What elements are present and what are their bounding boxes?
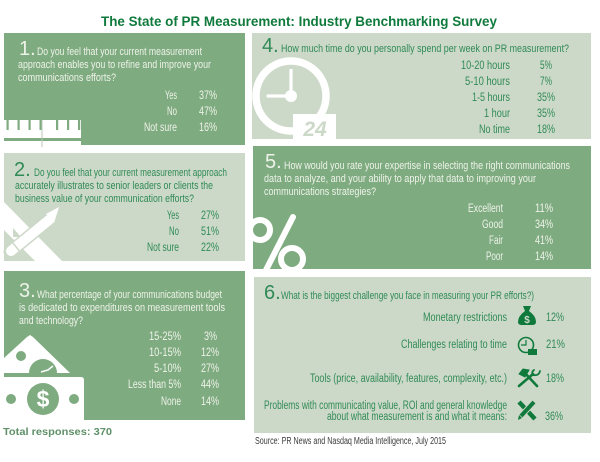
question 2 answers: No: [169, 226, 179, 238]
question 4 answers: 1-5 hours: [472, 92, 510, 104]
question 5 answers: 11%: [535, 203, 553, 215]
source note: Source: PR News and Nasdaq Media Intelligence, July 2015: [255, 436, 446, 447]
question 3 answers: [128, 331, 219, 408]
question 4 answers: 10-20 hours: [461, 60, 510, 72]
question 4 answers: No time: [479, 124, 510, 136]
question 3 number: 3.: [19, 280, 36, 302]
question 2 answers: Yes: [167, 210, 179, 222]
panel: question 4: [252, 33, 591, 141]
question 5 answers: 34%: [535, 219, 553, 231]
icon: hammer and wrench: [519, 369, 540, 386]
question 4 answers: [461, 60, 555, 136]
question 2 number: 2.: [14, 159, 31, 181]
icon: pencil and ruler small: [518, 402, 535, 420]
answer: monetary restrictions: Monetary restrictions: [423, 312, 507, 324]
answer: monetary restrictions: 12%: [546, 312, 564, 324]
question 1 number: 1.: [19, 38, 36, 60]
icon: money bag: [518, 306, 536, 326]
question 1 answers: Not sure: [144, 122, 177, 134]
question 2 answers: Not sure: [147, 242, 179, 254]
panel: question 3: [0, 271, 245, 420]
question 2 text: business value of your communication efforts?: [15, 193, 194, 205]
question 5 answers: 41%: [535, 235, 553, 247]
question 3 answers: 44%: [201, 379, 219, 391]
question 3 text: and technology?: [19, 315, 83, 327]
question 5 answers: Poor: [486, 251, 503, 263]
question 5 answers: Good: [482, 219, 503, 231]
question 5 text: data to analyze, and your ability to apply that data to improving your: [264, 173, 536, 185]
question 3 answers: 12%: [201, 347, 219, 359]
question 1 answers: [144, 90, 217, 134]
question 5 text: communications strategies?: [264, 186, 376, 198]
question 1 answers: No: [167, 106, 177, 118]
question 2 text: accurately illustrates to senior leaders or clients the: [15, 180, 213, 192]
question 3 answers: 3%: [204, 331, 217, 343]
question 4 answers: 1 hour: [484, 108, 510, 120]
question 3 text: is dedicated to expenditures on measurement tools: [19, 302, 225, 314]
question 3 text: What percentage of your communications budget: [37, 289, 222, 301]
question 3 answers: 10-15%: [149, 347, 181, 359]
icon: clock 24: 24: [302, 118, 327, 141]
question 1 answers: 37%: [199, 90, 217, 102]
icon: clock 24: [256, 61, 336, 141]
question 3 answers: 27%: [201, 363, 219, 375]
answer: time: 21%: [546, 339, 565, 351]
question 5 answers: Fair: [489, 235, 503, 247]
panel: question 1: [4, 33, 245, 147]
icon: small clock: [518, 338, 537, 355]
question 5 text: [264, 160, 570, 198]
question 5 answers: 14%: [535, 251, 553, 263]
question 1 text: Do you feel that your current measurement: [37, 46, 202, 58]
answer: communicating value: [264, 400, 563, 423]
question 3 answers: 15-25%: [149, 331, 181, 343]
question 1 text: approach enables you to refine and improve your: [18, 59, 211, 71]
answer: tools: 18%: [546, 373, 564, 385]
total responses: Total responses: 370: [3, 427, 112, 438]
question 1 answers: 16%: [199, 122, 217, 134]
question 2 answers: 22%: [201, 242, 219, 254]
question 1 text: communications efforts?: [18, 72, 116, 84]
answer: communicating value: Problems with communicating value, ROI and general knowledge: [264, 400, 507, 412]
icon: money: $: [37, 386, 50, 412]
question 3 answers: 5-10%: [154, 363, 181, 375]
question 4 number: 4.: [262, 35, 279, 57]
title: The State of PR Measurement: Industry Benchmarking Survey: [101, 14, 497, 29]
icon: ruler: [4, 120, 81, 147]
question 1 answers: Yes: [165, 90, 177, 102]
question 4 answers: 35%: [537, 108, 555, 120]
question 4 answers: 5-10 hours: [465, 76, 510, 88]
answer: communicating value: 36%: [545, 411, 563, 423]
question 2 answers: 51%: [201, 226, 219, 238]
question 2 answers: [147, 210, 219, 254]
question 4 answers: 7%: [540, 76, 552, 88]
panel: question 2: [4, 153, 245, 261]
question 3 text: [19, 289, 225, 327]
question 3 answers: Less than 5%: [128, 379, 181, 391]
panel: question 5: [250, 146, 591, 272]
question 4 answers: 5%: [540, 60, 552, 72]
answer: tools: Tools (price, availability, features, complexity, etc.): [310, 373, 507, 385]
panel: question 6: [254, 277, 591, 433]
question 1 answers: 47%: [199, 106, 217, 118]
question 1 text: [18, 46, 211, 84]
question 5 number: 5.: [265, 151, 282, 173]
question 5 answers: [468, 203, 553, 263]
icon: money bag: $: [524, 315, 530, 326]
question 2 answers: 27%: [201, 210, 219, 222]
question 3 answers: 14%: [201, 396, 219, 408]
question 5 answers: Excellent: [468, 203, 504, 215]
question 4 answers: 18%: [537, 124, 555, 136]
icon: percent sign: [250, 217, 303, 272]
question 2 text: Do you feel that your current measurement approach: [34, 167, 227, 179]
icon: pencil and ruler: [4, 202, 62, 261]
question 6 number: 6.: [264, 282, 281, 304]
icon: money: [0, 335, 84, 420]
answer: time: Challenges relating to time: [401, 339, 507, 351]
question 4 answers: 35%: [537, 92, 555, 104]
answer: communicating value: about what measurement is and what it means:: [327, 411, 507, 423]
question 2 text: [15, 167, 227, 205]
question 3 answers: None: [161, 396, 181, 408]
